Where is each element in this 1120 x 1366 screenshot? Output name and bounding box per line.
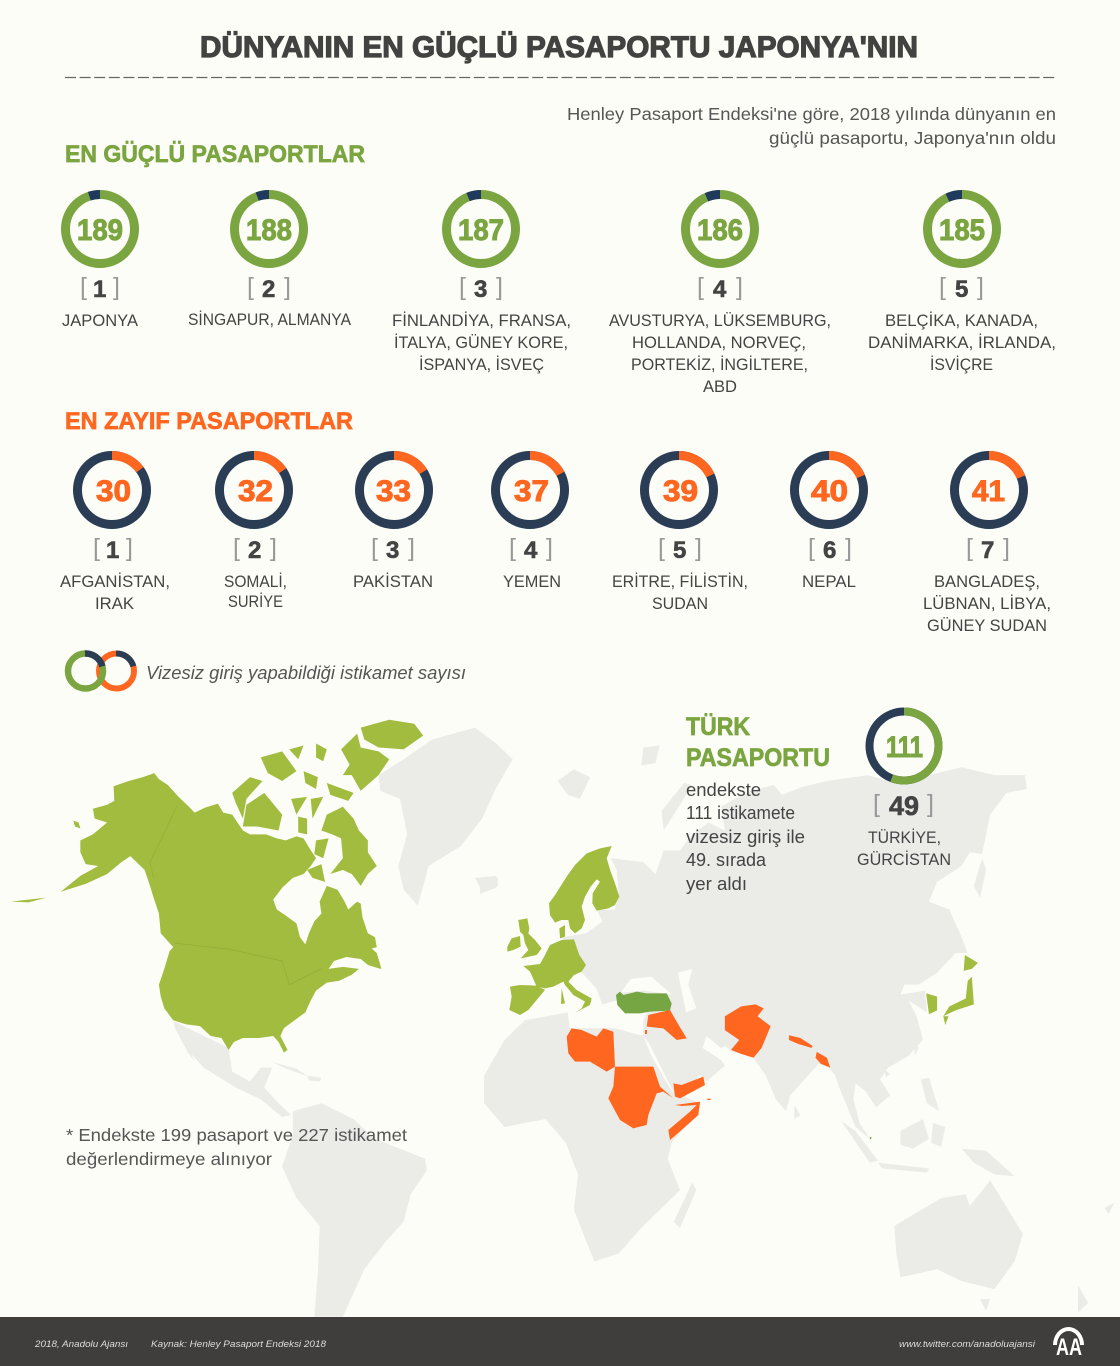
weak passport 4: [ xyxy=(509,534,516,562)
strong passport 2 xyxy=(188,185,351,329)
strong passport 3: İTALYA, GÜNEY KORE, xyxy=(394,333,568,352)
weak passport 4 xyxy=(496,456,564,591)
footer bar: Kaynak: Henley Pasaport Endeksi 2018 xyxy=(151,1339,327,1350)
icon: agency logo xyxy=(1053,1327,1084,1361)
weak passport 4: 37 xyxy=(514,475,549,508)
strong passport 3: 3 xyxy=(474,276,487,303)
weak passport 3: ] xyxy=(408,534,415,562)
weak passport 2 xyxy=(220,456,288,611)
strong passport 1: [ xyxy=(80,273,87,301)
turkish passport text: vizesiz giriş ile xyxy=(686,826,805,847)
strong passport 3: 187 xyxy=(458,214,504,247)
weak passport 3 xyxy=(353,456,433,591)
map: south asia orange countries xyxy=(725,1004,830,1068)
map: green japan and south korea xyxy=(870,955,978,1139)
weak passport 5: [ xyxy=(658,534,665,562)
weak passport 1: [ xyxy=(93,534,100,562)
weak passport 1: 30 xyxy=(96,475,131,508)
legend xyxy=(68,654,466,688)
strong passport 4: 186 xyxy=(697,214,743,247)
footer bar: 2018, Anadolu Ajansı xyxy=(34,1339,128,1350)
weak passport 2: 2 xyxy=(248,537,261,564)
weak passport 3: 33 xyxy=(376,475,411,508)
icon: agency logo: AA xyxy=(1056,1334,1082,1361)
turkish passport ring: ] xyxy=(927,790,934,818)
weak passport 1: AFGANİSTAN, xyxy=(60,572,170,591)
weak passport 5: 39 xyxy=(663,475,698,508)
strong passport 2: SİNGAPUR, ALMANYA xyxy=(188,310,351,329)
strong passport 2: 2 xyxy=(262,276,275,303)
footnote: değerlendirmeye alınıyor xyxy=(66,1149,272,1169)
intro text: Henley Pasaport Endeksi'ne göre, 2018 yılında dünyanın en xyxy=(567,104,1056,124)
weak passport 6 xyxy=(794,456,864,591)
strong passport 5: 5 xyxy=(955,276,968,303)
strong passport 3 xyxy=(392,184,571,374)
map: africa and arabia orange countries xyxy=(567,1010,711,1140)
footnote: * Endekste 199 pasaport ve 227 istikamet xyxy=(66,1125,407,1145)
strong passport 1: 189 xyxy=(77,214,123,247)
weak passport 5: SUDAN xyxy=(652,595,708,613)
strong passport 1: ] xyxy=(113,273,120,301)
weak passport 6: [ xyxy=(808,534,815,562)
strong passport 1 xyxy=(57,186,143,330)
weak passport 3: 3 xyxy=(386,537,399,564)
weak passport 6: 40 xyxy=(811,475,848,508)
strong passport 2: [ xyxy=(247,273,254,301)
turkish passport heading: PASAPORTU xyxy=(686,744,830,772)
weak passport 3: [ xyxy=(371,534,378,562)
turkish passport ring: 111 xyxy=(886,731,923,764)
strong passport 4: 4 xyxy=(713,276,727,303)
weak passport 3: PAKİSTAN xyxy=(353,572,433,591)
strong passport 4: ] xyxy=(736,273,743,301)
weak passport 5: 5 xyxy=(673,537,686,564)
weak passport 7: GÜNEY SUDAN xyxy=(927,617,1047,635)
turkish passport ring: GÜRCİSTAN xyxy=(857,850,951,869)
weak passport 6: 6 xyxy=(823,537,836,564)
turkish passport text xyxy=(686,779,805,894)
title: DÜNYANIN EN GÜÇLÜ PASAPORTU JAPONYA'NIN xyxy=(200,31,918,64)
strong passport 5 xyxy=(868,183,1056,374)
legend: Vizesiz giriş yapabildiği istikamet sayısı xyxy=(146,663,466,683)
weak passport 2: ] xyxy=(270,534,277,562)
strong passport 5: [ xyxy=(939,273,946,301)
turkish passport text: yer aldı xyxy=(686,873,747,894)
weak passport 2: [ xyxy=(233,534,240,562)
weak passport 2: SOMALİ, xyxy=(224,572,287,591)
strong passport 4: PORTEKİZ, İNGİLTERE, xyxy=(631,355,808,374)
strong passport 2: ] xyxy=(284,273,291,301)
map: americas grey land xyxy=(173,728,512,1317)
map: turkey xyxy=(616,992,672,1013)
strong passport 3: İSPANYA, İSVEÇ xyxy=(419,355,544,374)
footnote xyxy=(66,1125,407,1169)
weak passport 2: SURİYE xyxy=(228,592,283,611)
strong passport 4 xyxy=(609,184,831,396)
strong passport 1: JAPONYA xyxy=(62,312,138,330)
weak passport 7: 41 xyxy=(972,475,1005,508)
strong passport 3: [ xyxy=(459,273,466,301)
strong passport 4: [ xyxy=(697,273,704,301)
strong passport 2: 188 xyxy=(246,214,292,247)
weak passport 1: IRAK xyxy=(95,595,134,613)
map: green europe xyxy=(507,846,619,1015)
intro text xyxy=(567,104,1056,148)
turkish passport ring: [ xyxy=(873,790,880,818)
weak passport 7 xyxy=(923,456,1051,635)
map: orange weakest passports xyxy=(567,1004,830,1140)
strong passport 4: ABD xyxy=(703,378,737,396)
map: green north america xyxy=(11,720,423,1053)
turkish passport ring xyxy=(857,712,951,869)
turkish passport text: 111 istikamete xyxy=(686,802,795,823)
weak passport 1 xyxy=(60,456,170,613)
weak passport 7: [ xyxy=(966,534,973,562)
heading: strongest passports: EN GÜÇLÜ PASAPORTLAR xyxy=(65,141,365,168)
strong passport 4: HOLLANDA, NORVEÇ, xyxy=(632,334,806,352)
turkish passport text: 49. sırada xyxy=(686,849,767,870)
weak passport 7: LÜBNAN, LİBYA, xyxy=(923,594,1051,613)
weak passport 2: 32 xyxy=(238,475,273,508)
strong passport 5: İSVİÇRE xyxy=(930,355,993,374)
weak passport 7: ] xyxy=(1003,534,1010,562)
weak passport 6: NEPAL xyxy=(802,573,856,591)
world map xyxy=(11,720,1115,1317)
turkish passport ring: 49 xyxy=(889,791,919,821)
footer bar: www.twitter.com/anadoluajansi xyxy=(899,1339,1036,1350)
strong passport 4: AVUSTURYA, LÜKSEMBURG, xyxy=(609,312,831,330)
weak passport 4: ] xyxy=(546,534,553,562)
weak passport 4: YEMEN xyxy=(503,573,561,591)
weak passport 5: ] xyxy=(695,534,702,562)
strong passport 5: BELÇİKA, KANADA, xyxy=(885,311,1038,330)
strong passport 3: ] xyxy=(496,273,503,301)
strong passport 5: DANİMARKA, İRLANDA, xyxy=(868,333,1056,352)
turkish passport heading: TÜRK xyxy=(686,712,750,741)
turkish passport heading xyxy=(686,712,830,772)
strong passport 1: 1 xyxy=(93,276,106,303)
weak passport 1: 1 xyxy=(106,537,119,564)
weak passport 4: 4 xyxy=(524,537,538,564)
weak passport 6: ] xyxy=(845,534,852,562)
heading: weakest passports: EN ZAYIF PASAPORTLAR xyxy=(65,408,353,435)
strong passport 5: ] xyxy=(977,273,984,301)
weak passport 5: ERİTRE, FİLİSTİN, xyxy=(612,572,748,591)
intro text: güçlü pasaportu, Japonya'nın oldu xyxy=(769,128,1056,148)
turkish passport ring: TÜRKİYE, xyxy=(868,828,941,847)
weak passport 7: 7 xyxy=(981,537,994,564)
strong passport 5: 185 xyxy=(939,214,985,247)
turkish passport text: endekste xyxy=(686,779,761,800)
weak passport 5 xyxy=(612,456,748,613)
strong passport 3: FİNLANDİYA, FRANSA, xyxy=(392,311,571,330)
map: borders inside north america xyxy=(150,807,321,985)
weak passport 1: ] xyxy=(126,534,133,562)
map: old world grey land xyxy=(480,732,1115,1313)
map: inland seas xyxy=(582,898,696,1012)
weak passport 7: BANGLADEŞ, xyxy=(934,573,1040,591)
footer bar xyxy=(0,1317,1120,1366)
